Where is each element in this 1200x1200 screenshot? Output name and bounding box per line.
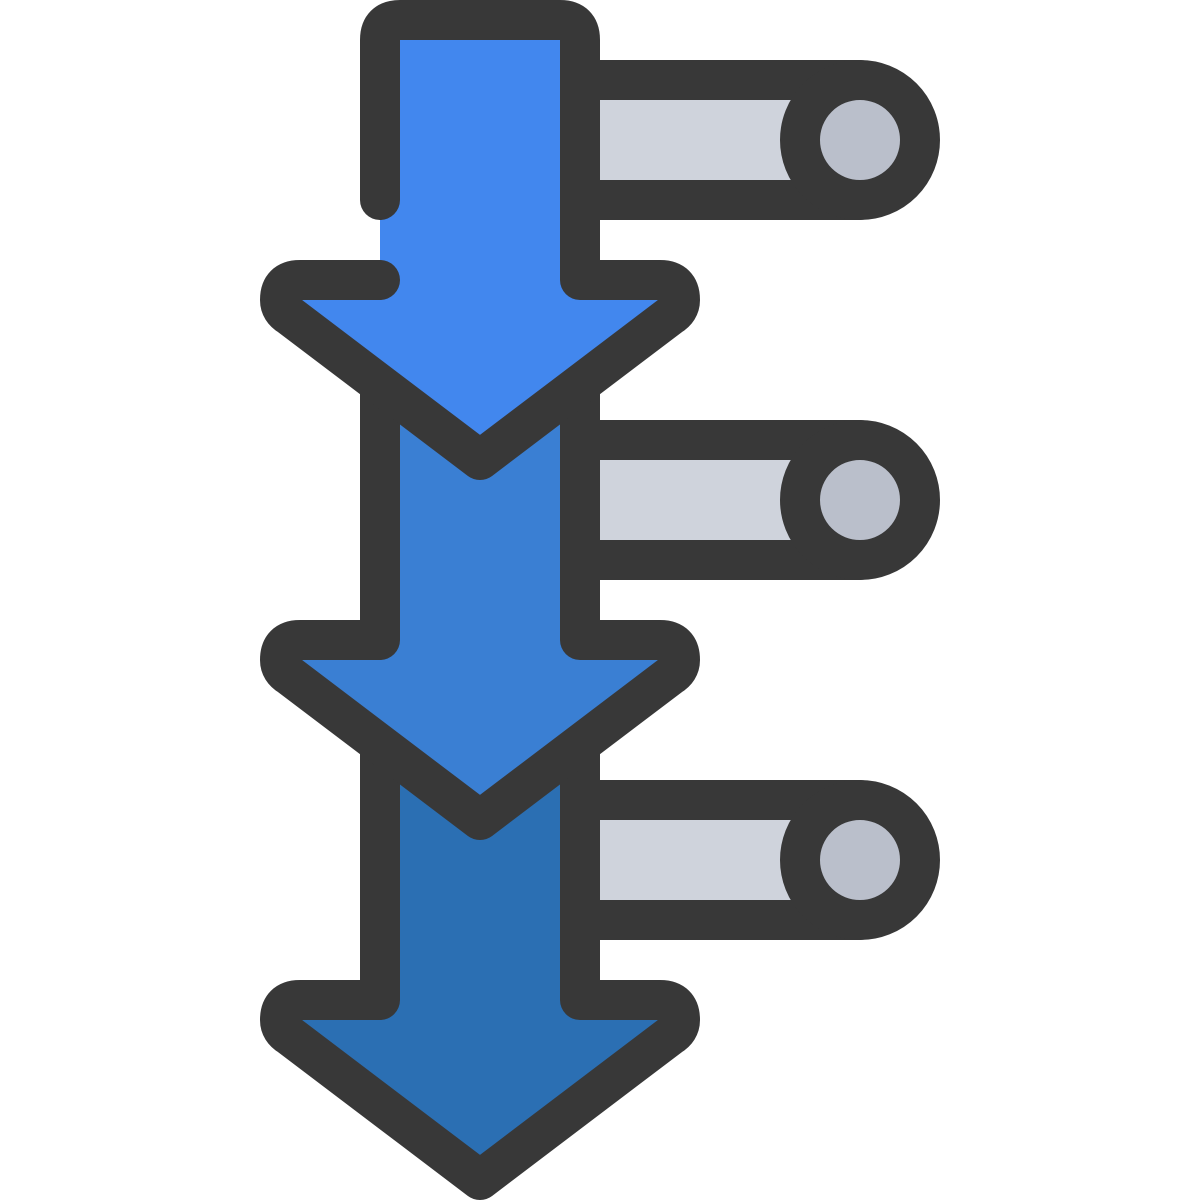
arrow: middle (280, 340, 680, 820)
pill: top (580, 80, 920, 200)
arrow: top (280, 20, 680, 460)
arrow: bottom (280, 700, 680, 1180)
pill: bottom (580, 800, 920, 920)
pill: middle (580, 440, 920, 560)
